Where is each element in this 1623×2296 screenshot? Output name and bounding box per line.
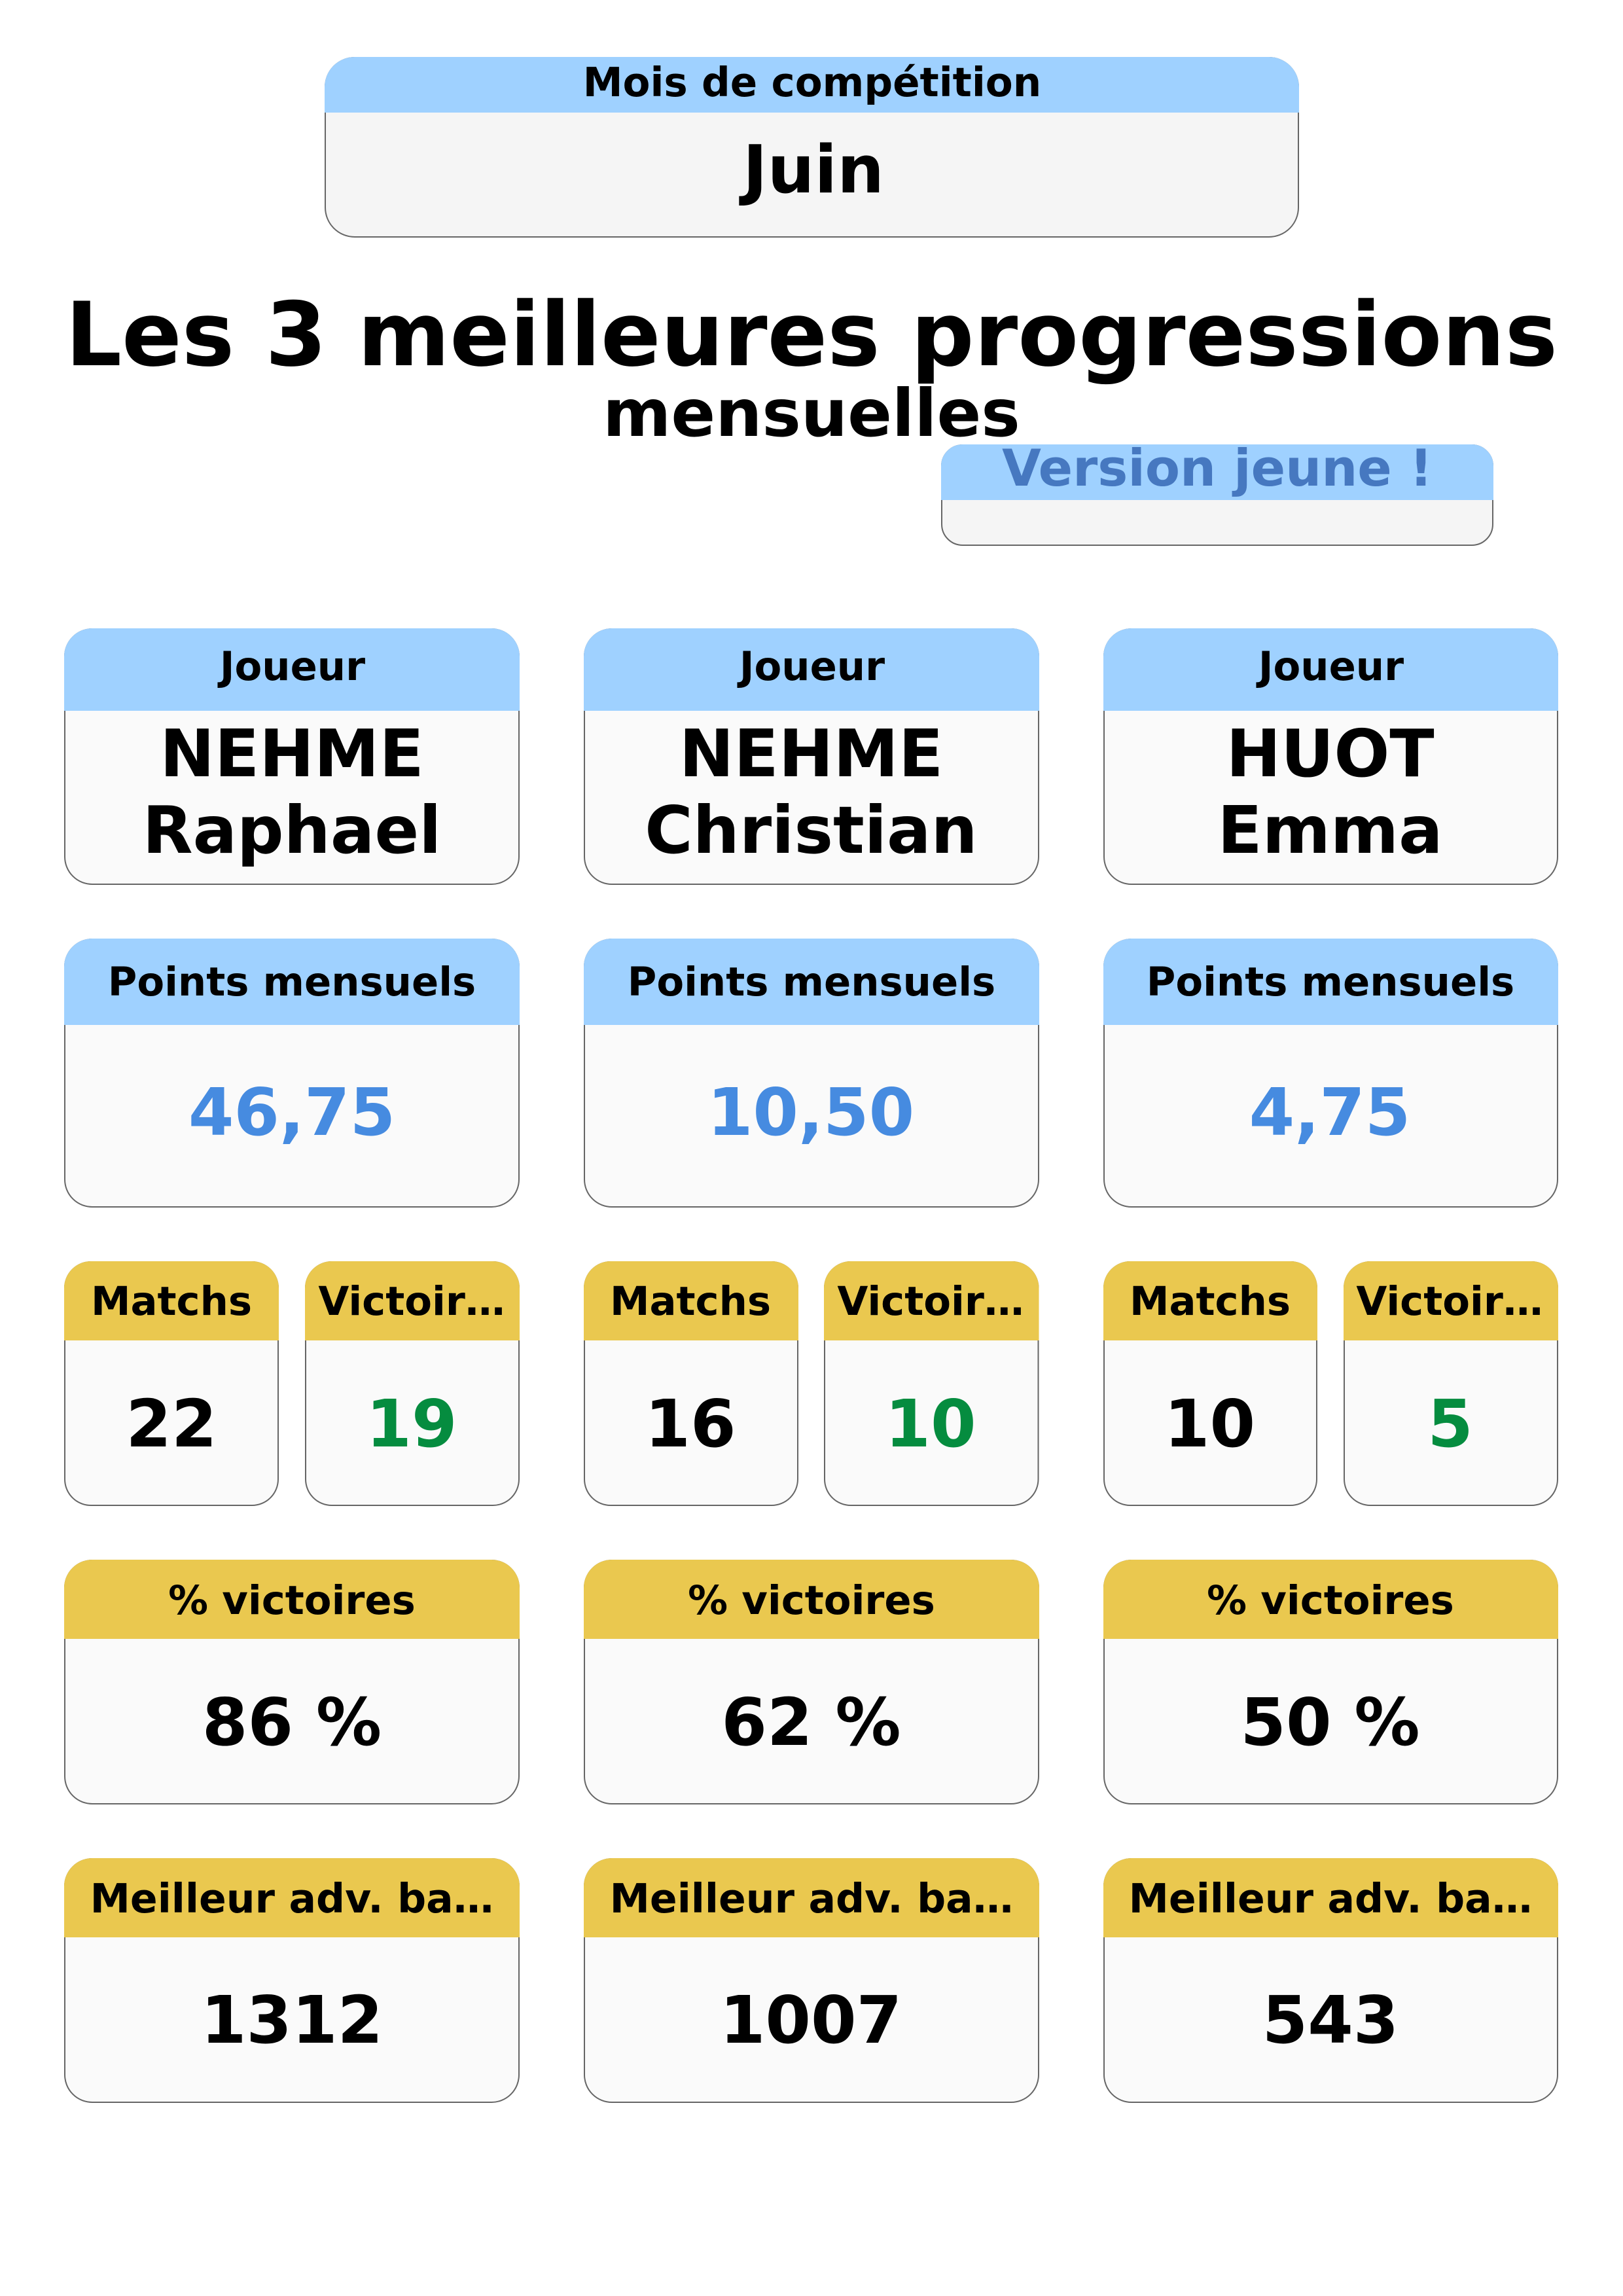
panel: player 2: NEHME xyxy=(679,715,943,792)
panel: wins 3 xyxy=(1344,1262,1558,1505)
column 1: NEHME Raphael xyxy=(65,629,519,2102)
panel: win rate 3: 50 % xyxy=(1240,1684,1420,1761)
panel: best opponent 3 xyxy=(1104,1859,1558,2102)
panel: monthly points 2: Points mensuels xyxy=(628,960,995,1005)
panel: monthly points 1: Points mensuels xyxy=(108,960,476,1005)
panel: competition month xyxy=(325,58,1298,237)
subtitle: mensuelles xyxy=(603,375,1020,452)
panel: best opponent 2 xyxy=(584,1859,1039,2102)
panel: player 3: Joueur xyxy=(1256,644,1404,690)
panel: wins 1: 19 xyxy=(366,1386,457,1462)
panel: matches 1 xyxy=(65,1262,278,1505)
panel: wins 3: Victoir… xyxy=(1356,1279,1543,1325)
panel: best opponent 2: 1007 xyxy=(720,1982,902,2058)
panel: win rate 2 xyxy=(584,1560,1039,1804)
panel: best opponent 3: Meilleur adv. ba… xyxy=(1129,1875,1532,1922)
column 2: NEHME Christian xyxy=(584,629,1039,2102)
panel: player 3: HUOT xyxy=(1226,715,1435,792)
panel: matches 3 xyxy=(1104,1262,1317,1505)
panel: win rate 2: 62 % xyxy=(721,1684,901,1761)
column 3: HUOT Emma xyxy=(1104,629,1558,2102)
panel: wins 3: 5 xyxy=(1427,1386,1473,1462)
panel: matches 1: Matchs xyxy=(91,1279,252,1325)
panel: win rate 3 xyxy=(1104,1560,1558,1804)
panel: player 2: Christian xyxy=(645,792,978,869)
panel: player 1: Raphael xyxy=(143,792,441,869)
panel: matches 1: 22 xyxy=(126,1386,217,1462)
panel: player 3 xyxy=(1104,629,1558,884)
title: Les 3 meilleures progressions xyxy=(65,283,1558,386)
panel: wins 1: Victoir… xyxy=(318,1279,505,1325)
panel: best opponent 1 xyxy=(65,1859,519,2102)
panel: best opponent 2: Meilleur adv. ba… xyxy=(610,1875,1013,1922)
panel: wins 2 xyxy=(825,1262,1038,1505)
panel: matches 2 xyxy=(584,1262,798,1505)
panel: monthly points 2 xyxy=(584,939,1039,1207)
panel: matches 2: 16 xyxy=(645,1386,736,1462)
heading: competition month label: Mois de compétition xyxy=(583,60,1041,106)
panel: player 2: Joueur xyxy=(737,644,885,690)
panel: best opponent 1: 1312 xyxy=(201,1982,383,2058)
panel: wins 2: Victoir… xyxy=(837,1279,1024,1325)
panel: best opponent 3: 543 xyxy=(1262,1982,1399,2058)
panel: youth version badge xyxy=(942,439,1493,545)
panel: best opponent 1: Meilleur adv. ba… xyxy=(90,1875,493,1922)
panel: player 3: Emma xyxy=(1217,792,1443,869)
panel: monthly points 3 xyxy=(1104,939,1558,1207)
panel: wins 2: 10 xyxy=(885,1386,976,1462)
panel: matches 3: 10 xyxy=(1164,1386,1255,1462)
panel: monthly points 3: Points mensuels xyxy=(1147,960,1514,1005)
panel: wins 1 xyxy=(306,1262,519,1505)
badge text: Version jeune ! xyxy=(1002,439,1433,498)
panel: win rate 2: % victoires xyxy=(688,1578,935,1624)
panel: monthly points 1 xyxy=(65,939,519,1207)
title xyxy=(65,283,1558,452)
panel: matches 3: Matchs xyxy=(1130,1279,1291,1325)
panel: player 2 xyxy=(584,629,1039,884)
panel: win rate 3: % victoires xyxy=(1207,1578,1454,1624)
panel: monthly points 3: 4,75 xyxy=(1249,1074,1410,1151)
panel: win rate 1: 86 % xyxy=(202,1684,382,1761)
panel: monthly points 1: 46,75 xyxy=(188,1074,395,1151)
panel: player 1 xyxy=(65,629,519,884)
panel: win rate 1 xyxy=(65,1560,519,1804)
panel: player 1: Joueur xyxy=(217,644,365,690)
panel: win rate 1: % victoires xyxy=(168,1578,416,1624)
panel: matches 2: Matchs xyxy=(610,1279,771,1325)
month value: Juin xyxy=(739,131,884,208)
panel: monthly points 2: 10,50 xyxy=(707,1074,914,1151)
panel: player 1: NEHME xyxy=(160,715,424,792)
